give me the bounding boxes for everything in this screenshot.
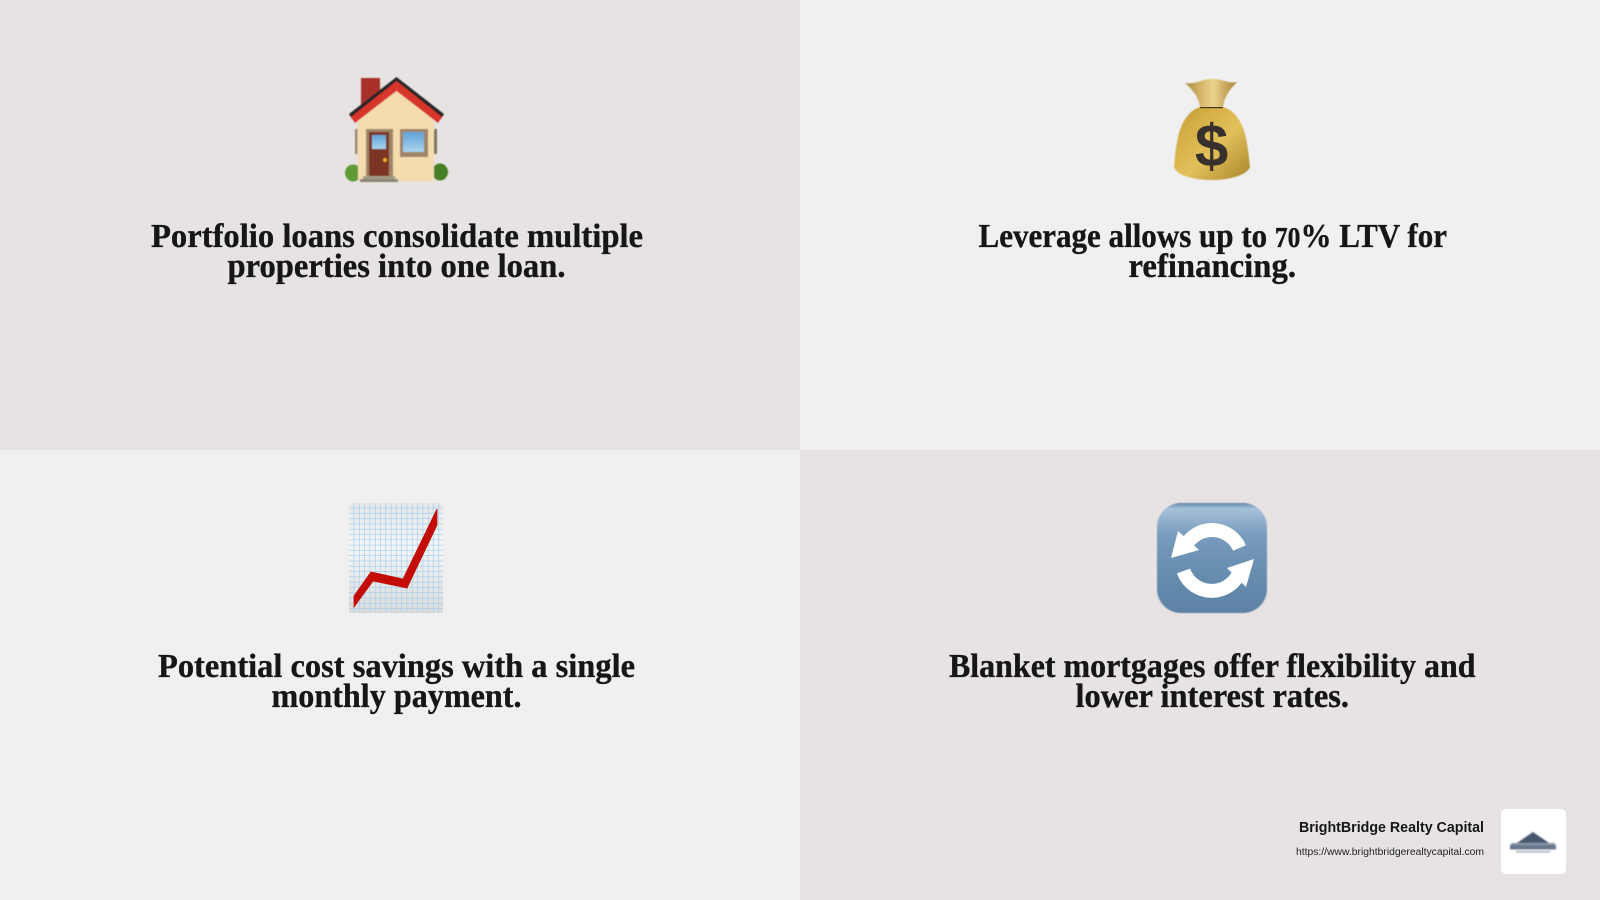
icon: money bag: $: [1195, 112, 1228, 180]
heading: portfolio loans: [151, 218, 643, 285]
icon: house: [345, 77, 448, 182]
footer: brand: [1296, 809, 1566, 874]
panel: portfolio loans: [0, 0, 800, 450]
heading: leverage: [978, 218, 1447, 285]
heading: cost savings: Potential cost savings with a single: [158, 648, 635, 685]
icon: rising chart: [349, 503, 443, 613]
logo: [1501, 809, 1566, 874]
brand url: https://www.brightbridgerealtycapital.com: [1296, 847, 1484, 858]
heading: cost savings: [158, 648, 635, 715]
panel: blanket mortgages: [800, 450, 1600, 900]
icon: money bag: [1174, 79, 1250, 180]
panel: cost savings: [0, 450, 800, 900]
panel: leverage: [800, 0, 1600, 450]
heading: blanket mortgages: Blanket mortgages offer flexibility and: [949, 648, 1476, 685]
brand name: BrightBridge Realty Capital: [1299, 820, 1484, 836]
heading: leverage: Leverage allows up to 70% LTV for: [978, 218, 1447, 255]
heading: portfolio loans: Portfolio loans consolidate multiple: [151, 218, 643, 255]
icon: refresh arrows: [1157, 503, 1267, 613]
heading: leverage: refinancing.: [1128, 248, 1296, 285]
heading: cost savings: monthly payment.: [272, 678, 522, 715]
heading: portfolio loans: properties into one loan.: [228, 248, 566, 285]
heading: blanket mortgages: lower interest rates.: [1076, 678, 1349, 715]
heading: blanket mortgages: [949, 648, 1476, 715]
